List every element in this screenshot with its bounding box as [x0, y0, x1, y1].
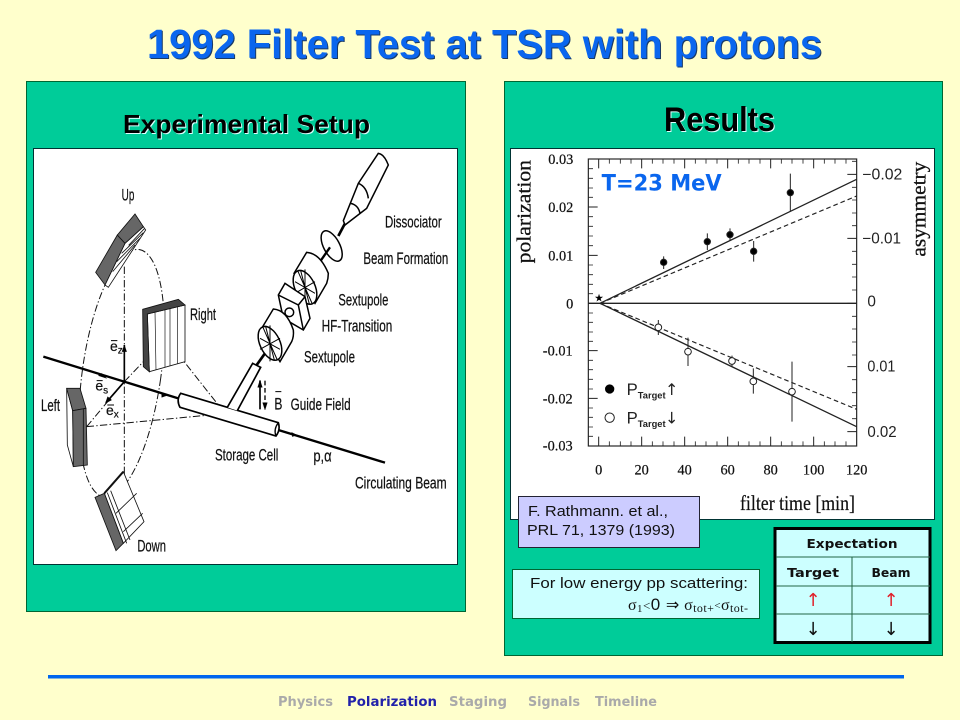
axis tick labels: 0.02 [548, 200, 573, 216]
title: 1992 Filter Test at TSR with protons [147, 21, 822, 67]
labels: Down [137, 537, 166, 556]
axis tick labels: 0 [867, 293, 876, 310]
note: low energy pp scattering: 1 [637, 603, 643, 615]
axis tick labels: -0.02 [543, 391, 573, 407]
labels: x [114, 410, 119, 421]
diagram: apparatus [34, 148, 458, 564]
detector: left [67, 388, 87, 467]
axis title: filter time: filter time [min] [740, 491, 855, 515]
panel: results [504, 82, 942, 656]
axis tick labels: 0.03 [548, 152, 573, 168]
labels: Sextupole [338, 291, 388, 310]
footer navigation: Polarization [347, 694, 437, 710]
labels: Storage Cell [215, 446, 278, 465]
filled data points [660, 174, 793, 269]
detector: down [95, 472, 144, 551]
footer navigation: Signals [528, 694, 580, 710]
legend: Target [638, 419, 666, 429]
citation box: F. Rathmann. et al., [528, 504, 668, 520]
heading: experimental setup: Experimental Setup [123, 109, 370, 139]
plot frame and ticks [588, 159, 857, 446]
labels: p,α [313, 447, 332, 466]
open data points [655, 320, 795, 422]
note: low energy pp scattering: For low energy pp scattering: [530, 576, 748, 592]
upper sextupole [294, 252, 328, 303]
lower sextupole [261, 309, 293, 362]
axis tick labels [543, 152, 902, 478]
note: low energy pp scattering: σ [721, 597, 730, 614]
citation box: PRL 71, 1379 (1993) [527, 523, 675, 539]
circulating beam line [43, 357, 385, 463]
axis tick labels: 80 [763, 462, 778, 478]
labels: Up [122, 186, 134, 205]
legend: ↓ [665, 409, 678, 428]
note: low energy pp scattering: σ [628, 597, 637, 614]
axis tick labels: 40 [678, 462, 692, 478]
table: expectation: Beam [872, 565, 910, 580]
note: low energy pp scattering: 0 ⇒ σ [651, 595, 693, 614]
axis tick labels: -0.03 [543, 439, 573, 455]
axis tick labels: 0.02 [867, 424, 897, 441]
labels: Circulating Beam [355, 473, 447, 492]
table: expectation: Target [787, 565, 839, 580]
axis tick labels: 100 [803, 462, 824, 478]
legend: Target [638, 390, 666, 400]
table: expectation [775, 528, 930, 642]
panel: experimental setup [26, 82, 466, 612]
axis tick labels: 0.01 [867, 359, 895, 376]
coordinate axes [97, 341, 297, 437]
storage cell [178, 363, 279, 436]
note: low energy pp scattering: tot- [730, 601, 748, 615]
axis title: asymmetry: asymmetry [909, 162, 931, 257]
footer navigation: Staging [449, 694, 507, 710]
chart: polarization versus filter time [510, 148, 934, 520]
labels: Beam Formation [363, 249, 448, 268]
labels: B [274, 394, 282, 413]
labels: s [103, 385, 108, 396]
legend: P [627, 380, 638, 399]
axis tick labels: 0.01 [548, 248, 573, 264]
table: expectation: ↓ [883, 619, 899, 640]
note: low energy pp scattering: < [643, 598, 650, 613]
axis tick labels: 120 [846, 462, 867, 478]
footer navigation: Physics [278, 694, 333, 710]
detector: right [143, 299, 185, 372]
table: expectation: ↓ [805, 619, 821, 640]
axis tick labels: -0.01 [543, 344, 573, 360]
footer rule [48, 675, 904, 678]
axis tick labels: −0.01 [862, 231, 901, 248]
legend [605, 380, 678, 429]
fit lines [588, 179, 857, 427]
labels: Left [41, 396, 60, 415]
labels: e [95, 378, 103, 394]
axis tick labels: −0.02 [862, 167, 902, 184]
axis title: polarization: polarization [513, 160, 535, 263]
footer navigation: Timeline [595, 694, 657, 710]
axis tick labels: 0 [566, 296, 573, 312]
labels: Dissociator [385, 212, 442, 231]
axis tick labels: 20 [635, 462, 649, 478]
labels: Guide Field [291, 395, 351, 414]
table: expectation: ↑ [883, 590, 899, 611]
table: expectation: Expectation [806, 536, 898, 551]
note: low energy pp scattering [512, 570, 760, 618]
note: low energy pp scattering: < [714, 600, 721, 612]
dash-dot construction lines [65, 244, 218, 513]
labels: e [110, 338, 118, 354]
table: expectation: ↑ [805, 590, 821, 611]
legend: ↑ [665, 380, 678, 399]
hf transition box [278, 283, 310, 330]
star marker: ★ [594, 292, 604, 305]
labels: HF-Transition [322, 317, 392, 336]
atomic beam source [253, 153, 388, 365]
labels: e [106, 402, 114, 418]
axis tick labels: 0 [595, 462, 602, 478]
note: low energy pp scattering: tot+ [693, 601, 714, 615]
citation box [518, 496, 700, 548]
heading: results: Results [664, 101, 775, 139]
labels [41, 186, 448, 556]
detector: up [96, 214, 146, 287]
labels: z [118, 346, 123, 357]
legend: P [627, 409, 638, 428]
labels: Sextupole [304, 347, 355, 366]
axis tick labels: 60 [721, 462, 735, 478]
labels: Right [190, 305, 216, 324]
energy label: T=23 MeV [602, 172, 722, 197]
footer navigation [278, 694, 657, 710]
